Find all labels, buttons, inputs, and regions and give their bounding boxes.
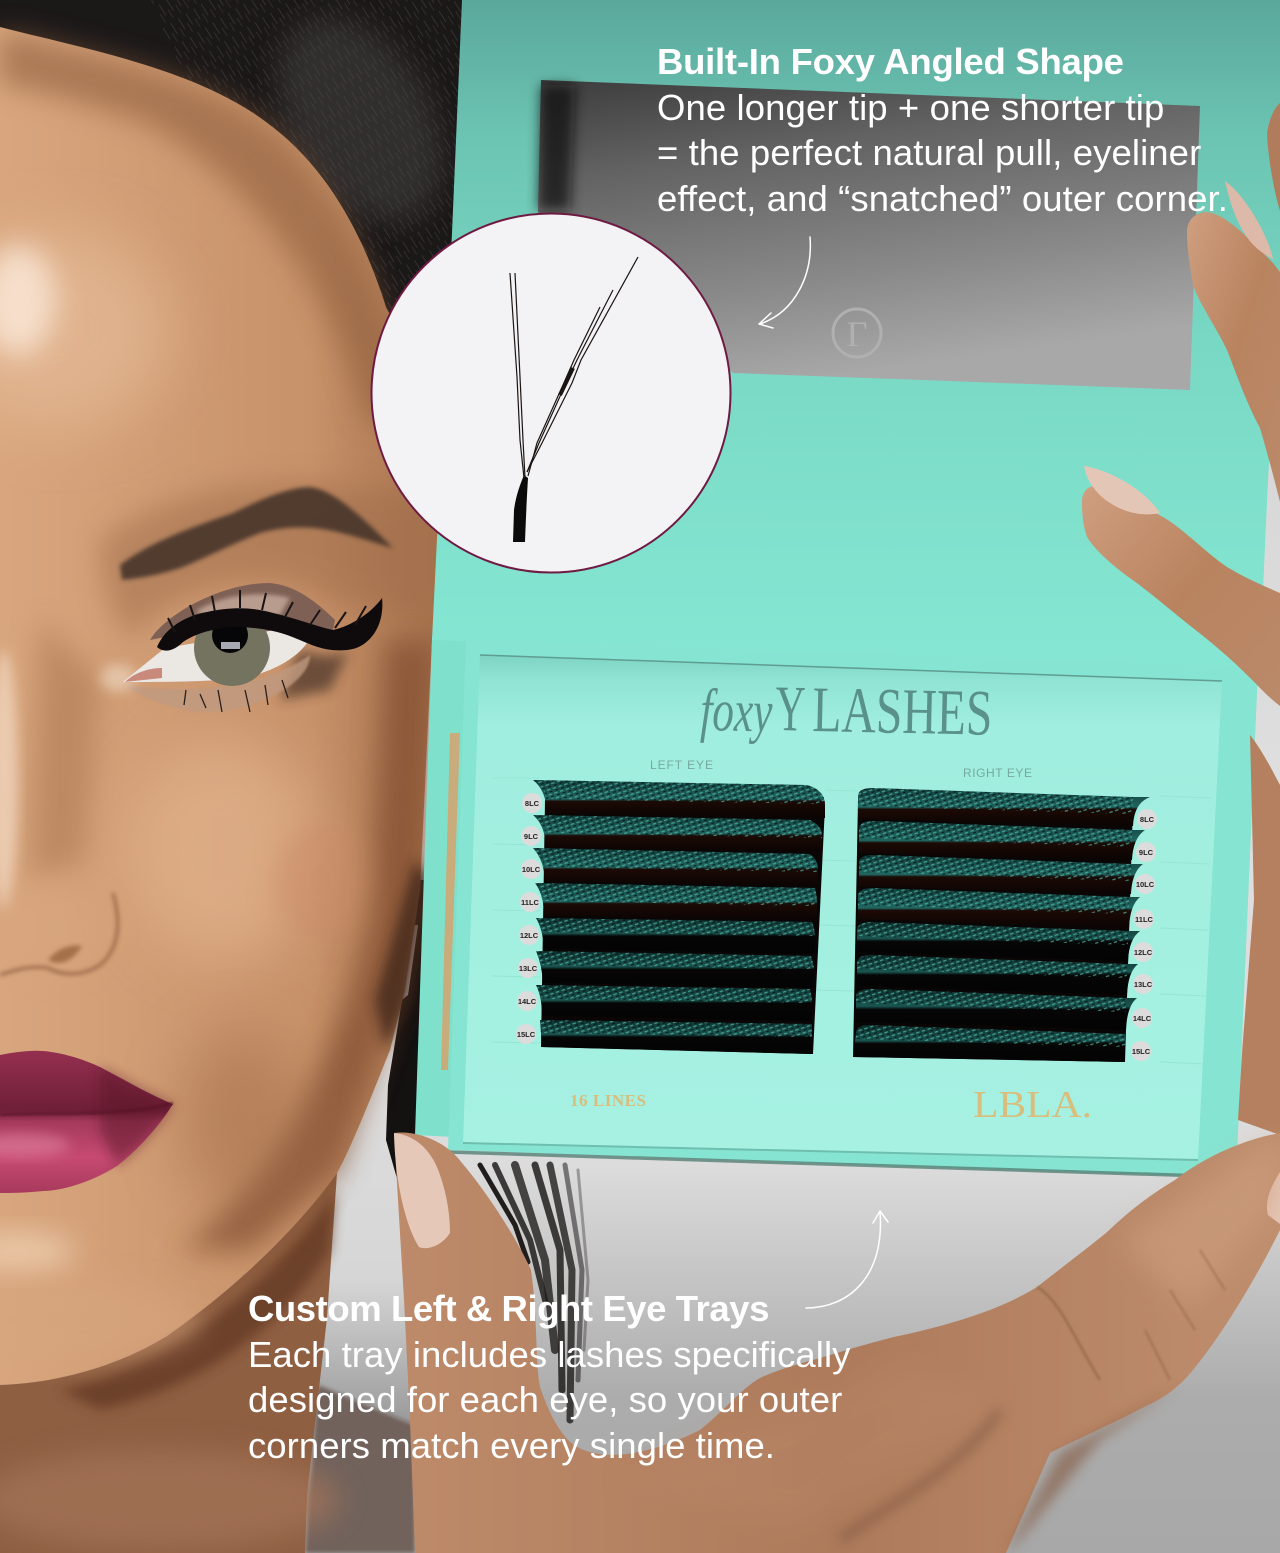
right eye lash rows: [853, 788, 1150, 1062]
gold labels: LBLA.: [973, 1084, 1092, 1126]
length labels: 8LC: [1140, 815, 1155, 824]
length labels: 15LC: [1132, 1047, 1151, 1056]
tray title: [700, 673, 993, 750]
tray slots: [492, 778, 1212, 1064]
cheek highlight: [130, 740, 320, 960]
box lid: [432, 0, 1280, 680]
middle finger nail: [1084, 466, 1160, 514]
eyebrow: [120, 487, 393, 580]
top right finger edge: [1267, 103, 1280, 211]
tray title: LASHES: [812, 674, 993, 750]
inner corner highlight: [100, 664, 136, 692]
length labels: 9LC: [524, 832, 539, 841]
callout: left and right eye trays: Custom Left & Right Eye Trays: [248, 1288, 769, 1329]
tray title: Y: [775, 673, 806, 746]
upper finger: [1187, 212, 1280, 502]
thumb and palm: [394, 1132, 1280, 1553]
smoky outer shadow: [280, 648, 350, 700]
knuckle creases: [1037, 1287, 1100, 1380]
length labels: 12LC: [1134, 948, 1153, 957]
sclera: [123, 630, 307, 682]
forehead highlight: [0, 230, 170, 430]
forehead top shading: [0, 30, 420, 420]
length labels: 15LC: [517, 1030, 536, 1039]
icon: Y-shaped lash: [510, 257, 638, 542]
face: [0, 27, 445, 1553]
callout: foxy angled shape: = the perfect natural pull, eyeliner: [657, 132, 1201, 173]
upper lash spikes: [168, 590, 366, 632]
callout: foxy angled shape: [657, 41, 1228, 219]
length labels: 10LC: [1136, 880, 1155, 889]
palm edge beside tray: [1238, 735, 1280, 1135]
lash inset circle: [372, 214, 730, 572]
right hand fingers: [1082, 103, 1280, 1135]
hair strand behind thumb: [480, 1165, 588, 1420]
thumb nail: [394, 1133, 450, 1248]
open tray: [415, 640, 1258, 1178]
length labels: [516, 793, 1157, 1061]
lower lid: [125, 655, 310, 712]
outer cheek shading: [180, 640, 435, 1250]
callout: foxy angled shape: One longer tip + one shorter tip: [657, 87, 1164, 128]
length labels: 13LC: [519, 964, 538, 973]
eye labels: [650, 758, 1032, 780]
callout: left and right eye trays: designed for each eye, so your outer: [248, 1379, 842, 1420]
neck: [0, 1173, 337, 1553]
eye socket shading: [100, 484, 430, 640]
upper finger nail: [1225, 181, 1273, 259]
length labels: 14LC: [518, 997, 537, 1006]
mirror: [538, 80, 1200, 390]
right thumb nail: [1267, 1172, 1280, 1224]
length labels: 10LC: [522, 865, 541, 874]
finger highlight: [1120, 1135, 1280, 1310]
gold labels: [570, 1084, 1092, 1126]
length labels: 12LC: [520, 931, 539, 940]
hair strand beside jaw: [386, 880, 440, 1217]
lower lashes: [184, 680, 288, 712]
logo mark: Γ: [847, 314, 867, 354]
length labels: 11LC: [521, 898, 540, 907]
tray title: foxy: [700, 677, 773, 745]
eye: [100, 583, 382, 712]
logo mark: [833, 309, 881, 357]
lips: [0, 1051, 173, 1193]
length labels: 8LC: [525, 799, 540, 808]
length labels: 14LC: [1133, 1014, 1152, 1023]
eye labels: LEFT EYE: [650, 758, 713, 772]
chin highlight: [0, 1232, 75, 1272]
middle finger: [1082, 486, 1280, 706]
left eye lash rows: [533, 780, 825, 1054]
callout: foxy angled shape: Built-In Foxy Angled Shape: [657, 41, 1124, 82]
callout: left and right eye trays: Each tray includes lashes specifically: [248, 1334, 850, 1375]
nose: [30, 620, 100, 880]
callout: left and right eye trays: [248, 1288, 850, 1466]
callout: foxy angled shape: effect, and “snatched” outer corner.: [657, 178, 1228, 219]
length labels: 13LC: [1134, 980, 1153, 989]
length labels: 11LC: [1135, 915, 1154, 924]
callout: left and right eye trays: corners match every single time.: [248, 1425, 775, 1466]
arrow: to tray: [806, 1211, 888, 1308]
jaw shadow: [60, 1190, 335, 1410]
hair: [0, 0, 476, 1217]
gold labels: 16 LINES: [570, 1091, 646, 1110]
eye labels: RIGHT EYE: [963, 766, 1032, 780]
upper lash band: [157, 598, 382, 651]
pupil: [212, 617, 248, 653]
length labels: 9LC: [1139, 848, 1154, 857]
iris: [194, 610, 270, 686]
arrow: to mirror lash: [759, 237, 810, 328]
eyelid shimmer: [150, 583, 335, 645]
